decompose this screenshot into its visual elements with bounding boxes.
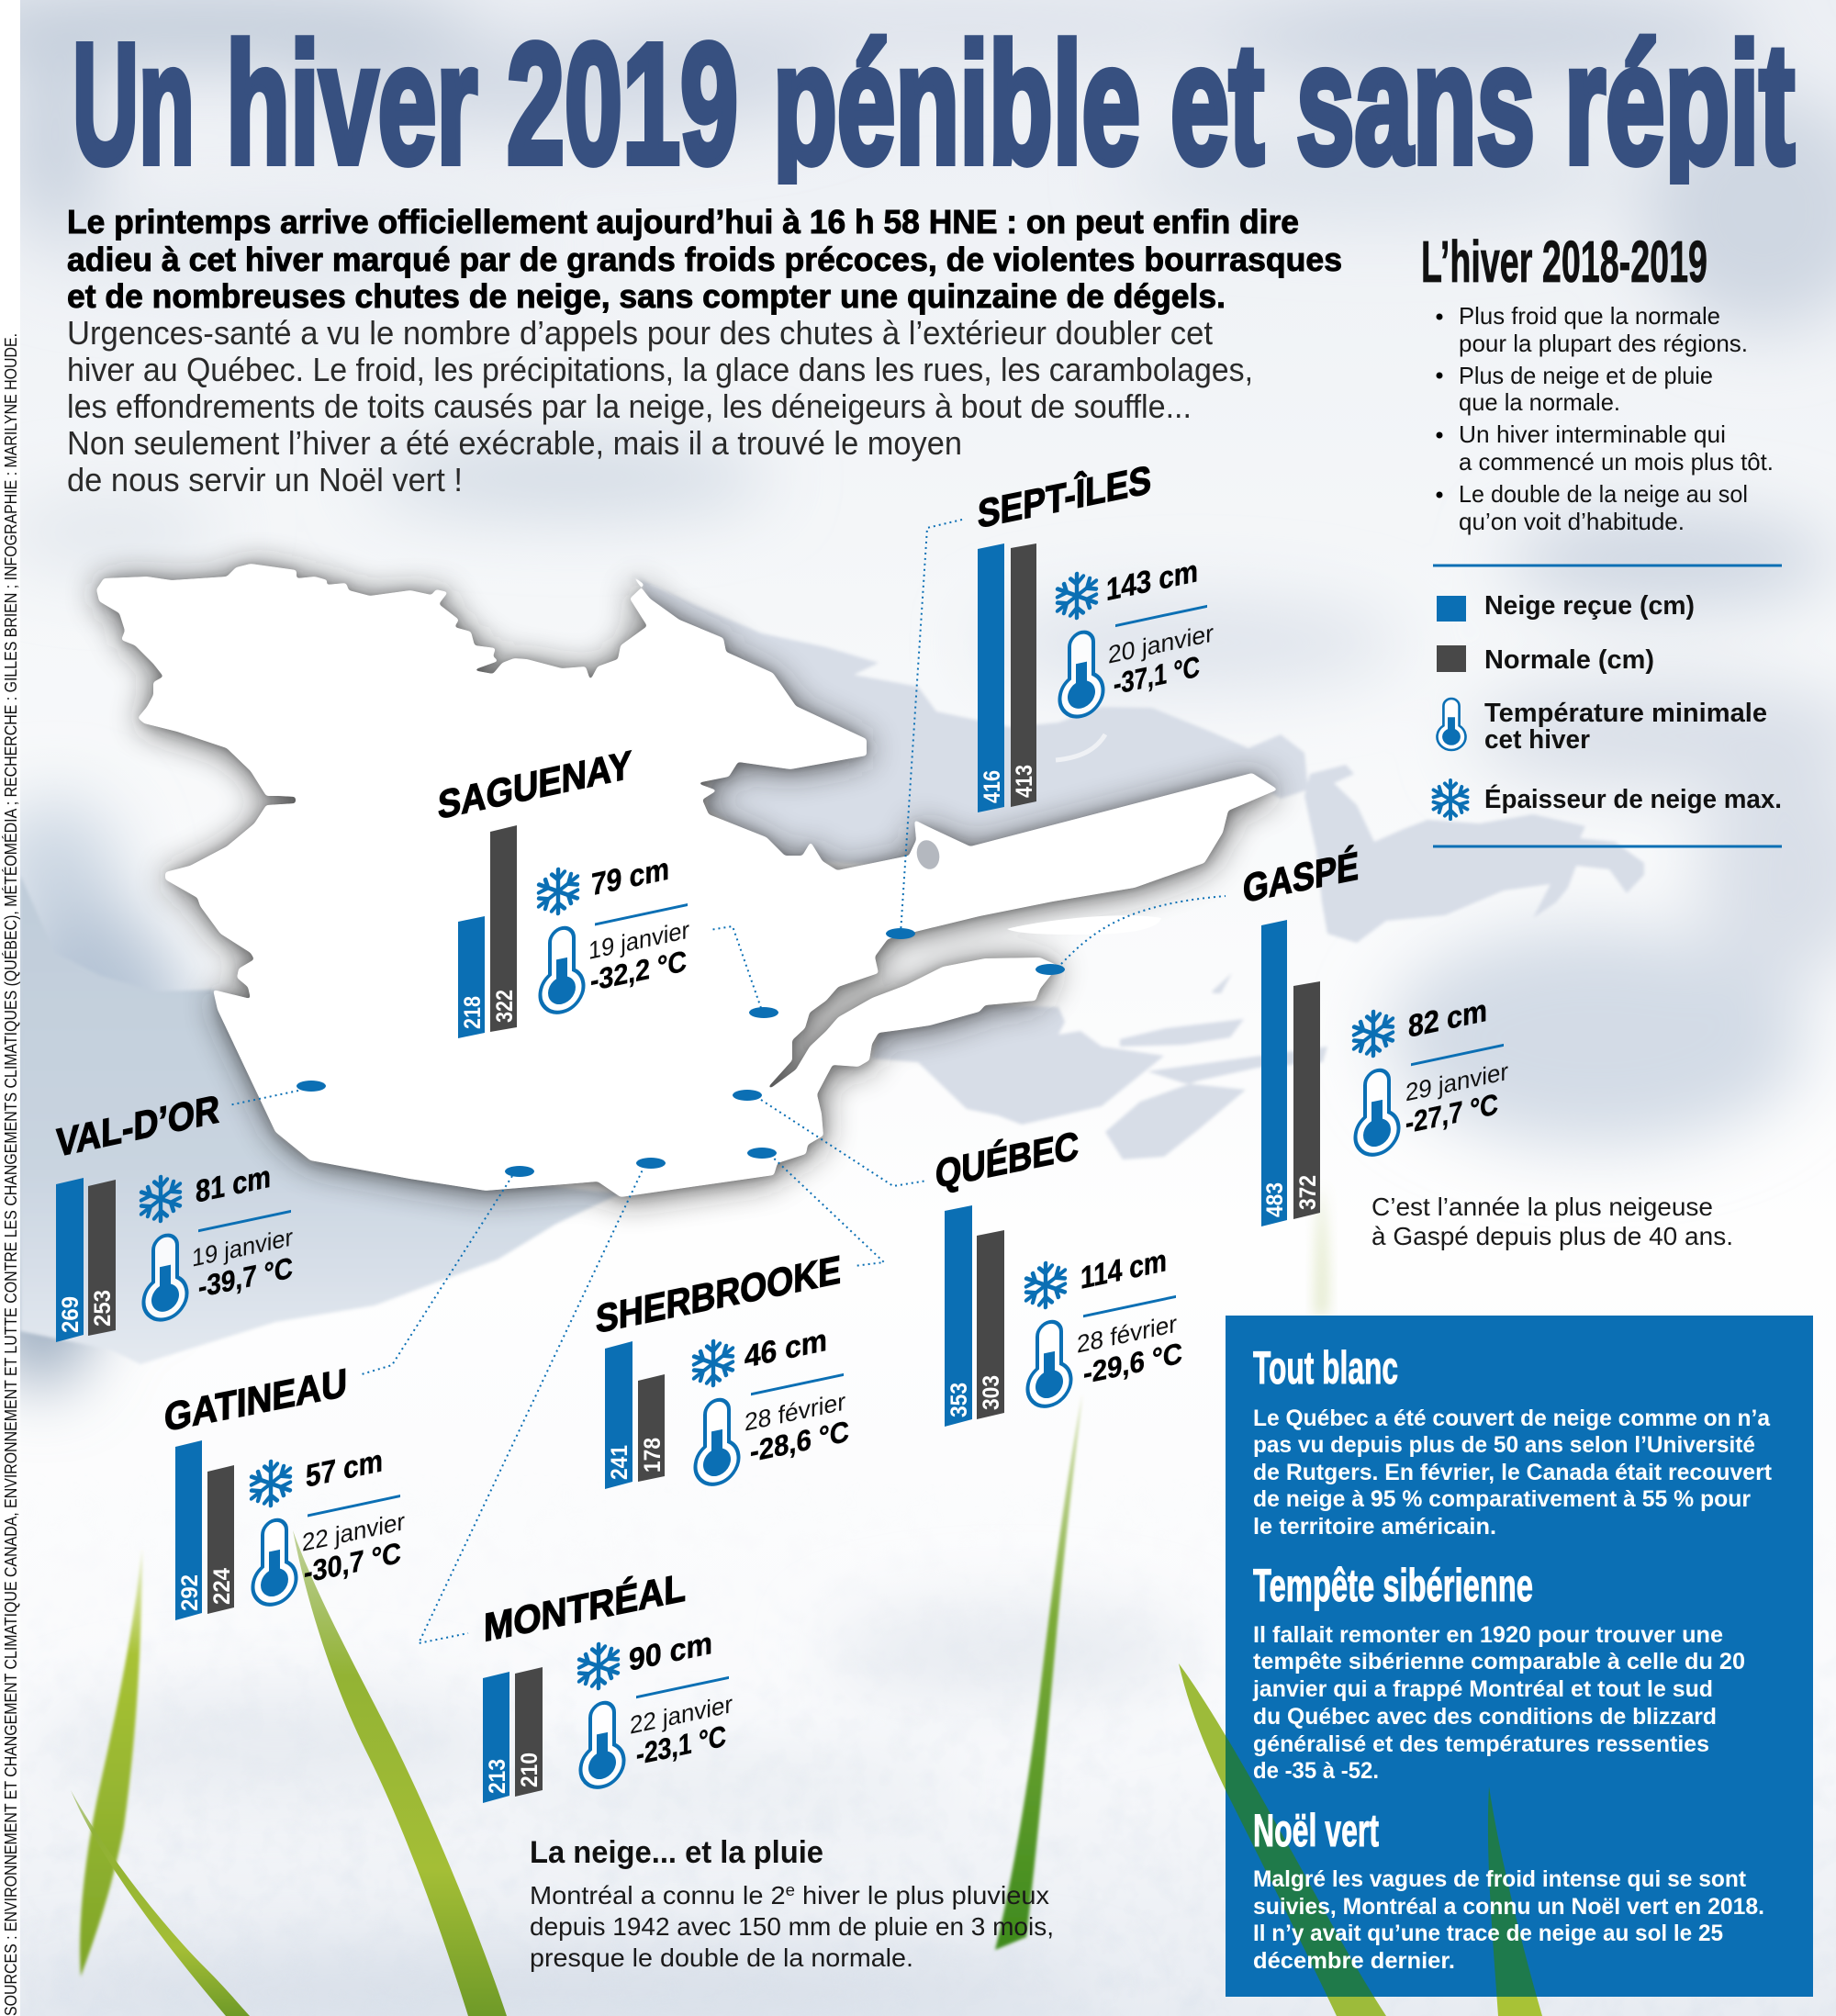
rain note body: Montréal a connu le 2 bbox=[530, 1881, 777, 1910]
bars: Val-d'Or: 269 bbox=[58, 1296, 84, 1333]
city: Val-d'Or bbox=[56, 1088, 293, 1342]
section: noël vert: décembre dernier. bbox=[1253, 1948, 1455, 1974]
intro: body text: hiver au Québec. Le froid, les précipitations, la glace dans les rues, les carambolages, bbox=[67, 351, 1253, 388]
title: Un bbox=[73, 9, 195, 199]
stats: Val-d'Or: -39,7 °C bbox=[198, 1251, 293, 1304]
map shadow bbox=[97, 565, 1279, 1200]
bars: Gaspé bbox=[1261, 920, 1321, 1226]
bullet list bbox=[1436, 302, 1774, 535]
section: tempête sibérienne bbox=[1252, 1560, 1745, 1784]
section: tout blanc: le territoire américain. bbox=[1253, 1514, 1496, 1540]
city: Val-d'Or: VAL-D’OR bbox=[56, 1088, 219, 1166]
city: Gatineau: GATINEAU bbox=[164, 1361, 347, 1440]
section: noël vert: suivies, Montréal a connu un Noël vert en 2018. bbox=[1253, 1894, 1764, 1920]
bars: Gaspé: 483 bbox=[1262, 1182, 1288, 1217]
intro: body text: Non seulement l’hiver a été exécrable, mais il a trouvé le moyen bbox=[67, 424, 962, 462]
intro: body text bbox=[67, 314, 1253, 498]
section: noël vert: Noël vert bbox=[1253, 1805, 1379, 1856]
city: Montréal: MONTRÉAL bbox=[484, 1564, 686, 1651]
stats: Gaspé: -27,7 °C bbox=[1405, 1087, 1498, 1139]
stats: Gaspé bbox=[1354, 983, 1508, 1159]
section: tempête sibérienne: du Québec avec des conditions de blizzard bbox=[1253, 1704, 1717, 1730]
stats: Sherbrooke: 46 cm bbox=[744, 1323, 827, 1375]
rain note heading: La neige... et la pluie bbox=[530, 1835, 823, 1870]
section: tout blanc: de Rutgers. En février, le Canada était recouvert bbox=[1253, 1460, 1773, 1485]
bars: Val-d'Or bbox=[56, 1178, 116, 1342]
stats: Gaspé: 29 janvier bbox=[1405, 1057, 1508, 1106]
stats: Gaspé: 82 cm bbox=[1408, 993, 1487, 1045]
stats: Gatineau: 57 cm bbox=[306, 1443, 383, 1495]
section: noël vert: Malgré les vagues de froid intense qui se sont bbox=[1253, 1866, 1747, 1892]
city: Sherbrooke bbox=[596, 1249, 849, 1489]
bars: Saguenay bbox=[458, 825, 518, 1038]
section: tempête sibérienne: tempête sibérienne comparable à celle du 20 bbox=[1253, 1649, 1745, 1674]
bars: Québec bbox=[945, 1205, 1004, 1427]
stats: Québec: -29,6 °C bbox=[1083, 1337, 1182, 1390]
panel side strip: sources credit: SOURCES : ENVIRONNEMENT ET CHANGEMENT CLIMATIQUE CANADA, ENVIRONNEMENT ET LUTTE CONTRE LES CHANGEMENTS CLIMATIQUES (QUÉBEC), MÉTÉOMÉDIA ; RECHERCHE : GILLES BRIEN ; INFOGRAPHIE : MARILYNE HOUDE. bbox=[2, 333, 20, 2016]
grass blades behind content bbox=[71, 1184, 1542, 2016]
stats: Montréal: -23,1 °C bbox=[636, 1719, 726, 1771]
bars: Sherbrooke bbox=[605, 1341, 666, 1489]
panel: blue facts box bbox=[1179, 1316, 1813, 2016]
rain note body: e bbox=[786, 1881, 795, 1899]
note: Gaspé: C’est l’année la plus neigeuse bbox=[1371, 1193, 1713, 1221]
stats: Saguenay bbox=[539, 842, 689, 1017]
stats: Montréal: 22 janvier bbox=[630, 1689, 733, 1740]
bullet list: que la normale. bbox=[1459, 388, 1620, 416]
legend: normal: Normale (cm) bbox=[1484, 645, 1654, 675]
stats: Québec: 114 cm bbox=[1080, 1243, 1167, 1296]
section: tempête sibérienne: de -35 à -52. bbox=[1253, 1758, 1379, 1784]
legend: max snow depth bbox=[1434, 780, 1782, 819]
intro: bold lede: et de nombreuses chutes de neige, sans compter une quinzaine de dégels. bbox=[67, 277, 1226, 315]
bars: Sherbrooke: 178 bbox=[640, 1438, 666, 1473]
bullet list: Le double de la neige au sol bbox=[1459, 480, 1748, 508]
bars: Sept-Îles: 416 bbox=[980, 770, 1005, 803]
stats: Saguenay: 79 cm bbox=[591, 852, 669, 902]
bullet list: a commencé un mois plus tôt. bbox=[1459, 448, 1774, 476]
note: Gaspé: à Gaspé depuis plus de 40 ans. bbox=[1371, 1222, 1733, 1250]
bars: Gatineau bbox=[175, 1440, 235, 1620]
section: tout blanc: Tout blanc bbox=[1253, 1342, 1398, 1394]
map of Québec bbox=[96, 564, 1278, 1197]
intro: body text: Urgences-santé a vu le nombre d’appels pour des chutes à l’extérieur doubler cet bbox=[67, 314, 1213, 352]
intro: bold lede bbox=[67, 203, 1342, 315]
stats: Val-d'Or: 81 cm bbox=[196, 1159, 271, 1210]
stats: Saguenay: -32,2 °C bbox=[590, 945, 687, 997]
stats: Gatineau: 22 janvier bbox=[302, 1506, 405, 1557]
stats: Québec bbox=[1026, 1234, 1182, 1411]
city: Québec bbox=[935, 1122, 1182, 1427]
section: noël vert bbox=[1253, 1805, 1764, 1974]
bullet list: Plus froid que la normale bbox=[1459, 302, 1720, 330]
section: tout blanc: pas vu depuis plus de 50 ans selon l’Université bbox=[1253, 1432, 1755, 1458]
title: hiver bbox=[226, 9, 477, 199]
title: 2019 bbox=[507, 9, 738, 199]
stats: Sherbrooke: 28 février bbox=[744, 1387, 845, 1437]
legend: max snow depth: Épaisseur de neige max. bbox=[1484, 783, 1782, 814]
bars: Val-d'Or: 253 bbox=[90, 1290, 116, 1327]
bars: Québec: 303 bbox=[979, 1375, 1004, 1410]
section: tout blanc: de neige à 95 % comparativement à 55 % pour bbox=[1253, 1486, 1751, 1512]
rain note body bbox=[530, 1881, 1054, 1972]
section: tout blanc bbox=[1253, 1342, 1773, 1540]
section: tempête sibérienne: généralisé et des températures ressenties bbox=[1253, 1731, 1709, 1757]
section: noël vert: Il n’y avait qu’une trace de neige au sol le 25 bbox=[1253, 1921, 1723, 1946]
bars: Saguenay: 322 bbox=[492, 990, 518, 1023]
city: Montréal bbox=[483, 1564, 733, 1803]
stats: Sherbrooke bbox=[694, 1313, 849, 1489]
legend: snow received: Neige reçue (cm) bbox=[1484, 591, 1695, 621]
stats: Sept-Îles bbox=[1058, 544, 1214, 722]
section: tempête sibérienne: Il fallait remonter en 1920 pour trouver une bbox=[1253, 1622, 1723, 1648]
stats: Val-d'Or: 19 janvier bbox=[192, 1223, 293, 1272]
background land: surrounding regions bbox=[20, 578, 1644, 1364]
stats: Québec: 28 février bbox=[1077, 1309, 1177, 1359]
bars: Montréal: 213 bbox=[485, 1759, 510, 1794]
bars: Gatineau: 224 bbox=[209, 1568, 235, 1605]
title: pénible bbox=[773, 9, 1140, 199]
legend bbox=[1433, 564, 1782, 848]
title bbox=[75, 33, 1796, 185]
bars: Montréal: 210 bbox=[517, 1753, 543, 1787]
stats: Val-d'Or bbox=[141, 1148, 293, 1325]
stats: Sept-Îles: 20 janvier bbox=[1108, 619, 1214, 669]
map city dots bbox=[297, 928, 1065, 1177]
intro: bold lede: Le printemps arrive officiellement aujourd’hui à 16 h 58 HNE : on peut enfin dire bbox=[67, 203, 1299, 241]
bars: Montréal bbox=[483, 1667, 543, 1803]
city: Gaspé: GASPÉ bbox=[1243, 843, 1359, 912]
rain note body: depuis 1942 avec 150 mm de pluie en 3 mois, bbox=[530, 1912, 1054, 1941]
bars: Québec: 353 bbox=[946, 1383, 972, 1417]
section: tempête sibérienne: janvier qui a frappé Montréal et tout le sud bbox=[1252, 1676, 1713, 1702]
bullet list: qu’on voit d’habitude. bbox=[1459, 508, 1685, 535]
rain note bbox=[530, 1835, 1054, 1972]
city: Québec: QUÉBEC bbox=[935, 1122, 1079, 1197]
note: Gaspé bbox=[1371, 1193, 1733, 1250]
bullet list: Plus de neige et de pluie bbox=[1459, 362, 1713, 389]
bars: Gaspé: 372 bbox=[1295, 1175, 1321, 1210]
bullet list: pour la plupart des régions. bbox=[1459, 330, 1748, 357]
section: tout blanc: Le Québec a été couvert de neige comme on n’a bbox=[1253, 1406, 1771, 1431]
bullet list: Un hiver interminable qui bbox=[1459, 420, 1726, 448]
stats: Sherbrooke: -28,6 °C bbox=[750, 1415, 849, 1468]
stats: Gatineau bbox=[252, 1433, 405, 1609]
legend: minimum temperature bbox=[1437, 699, 1767, 755]
title: sans bbox=[1296, 9, 1535, 199]
city: Gatineau bbox=[164, 1361, 405, 1620]
city: Sept-Îles: SEPT-ÎLES bbox=[978, 456, 1151, 537]
dotted leaders bbox=[229, 520, 1226, 1643]
bars: Gatineau: 292 bbox=[177, 1574, 203, 1611]
stats: Sept-Îles: 143 cm bbox=[1106, 554, 1198, 608]
bars: Sept-Îles bbox=[978, 543, 1037, 812]
stats: Montréal bbox=[579, 1616, 733, 1792]
city: Sherbrooke: SHERBROOKE bbox=[596, 1249, 841, 1342]
sidebar: l'hiver 2018-2019 bbox=[1421, 229, 1774, 535]
title: et bbox=[1170, 9, 1264, 199]
stats: Sept-Îles: -37,1 °C bbox=[1114, 650, 1200, 700]
city: Saguenay bbox=[438, 744, 689, 1038]
intro: body text: de nous servir un Noël vert ! bbox=[67, 461, 463, 498]
city: Gaspé bbox=[1243, 843, 1508, 1226]
bars: Sherbrooke: 241 bbox=[607, 1445, 633, 1480]
rain note body: hiver le plus pluvieux bbox=[795, 1881, 1049, 1910]
legend: minimum temperature: cet hiver bbox=[1484, 725, 1590, 755]
rain note body: presque le double de la normale. bbox=[530, 1943, 913, 1972]
intro: body text: les effondrements de toits causés par la neige, les déneigeurs à bout de souffle... bbox=[67, 387, 1192, 425]
stats: Gatineau: -30,7 °C bbox=[304, 1536, 401, 1589]
bars: Saguenay: 218 bbox=[460, 996, 486, 1029]
stats: Montréal: 90 cm bbox=[629, 1626, 712, 1678]
bars: Sept-Îles: 413 bbox=[1012, 765, 1037, 798]
stats: Saguenay: 19 janvier bbox=[588, 915, 689, 965]
city: Sept-Îles bbox=[978, 456, 1214, 812]
legend: minimum temperature: Température minimale bbox=[1484, 699, 1767, 728]
intro: bold lede: adieu à cet hiver marqué par de grands froids précoces, de violentes bourrasques bbox=[67, 241, 1342, 278]
city: Saguenay: SAGUENAY bbox=[438, 744, 632, 828]
section: tempête sibérienne: Tempête sibérienne bbox=[1253, 1560, 1533, 1611]
